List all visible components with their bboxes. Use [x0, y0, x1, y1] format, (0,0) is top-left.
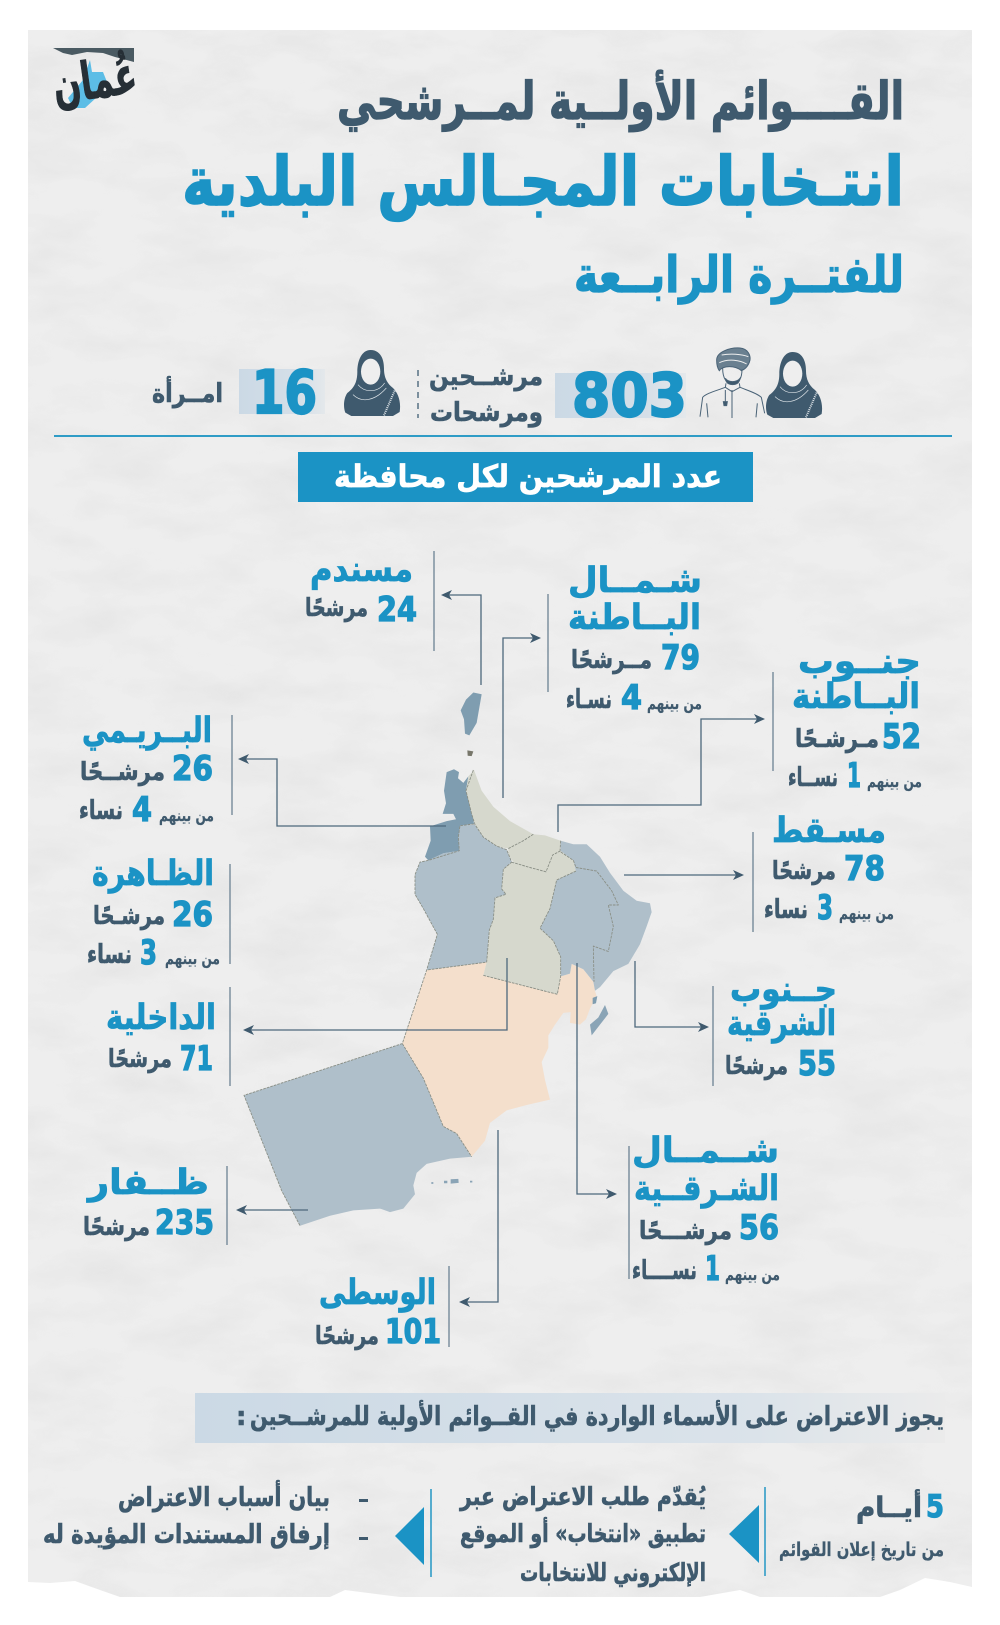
arrow: Al Buraimi — [238, 754, 446, 826]
region: Ad Dakhiliyah — [483, 851, 576, 994]
callout: South Batinah: 1 — [847, 756, 861, 796]
callout: North Batinah: مــرشحًا — [571, 645, 652, 675]
islands — [461, 692, 482, 735]
step: how to submit — [458, 1482, 706, 1588]
callout: Ad Dhahirah: 3 — [140, 933, 157, 973]
callout: North Sharqiyah: مرشـــحًا — [639, 1216, 732, 1246]
callout: Ad Dhahirah: الظـاهرة — [92, 854, 214, 894]
step: 5 days: 5 — [926, 1489, 944, 1525]
callout: South Sharqiyah — [713, 970, 837, 1086]
callout: South Sharqiyah: جــنوب — [730, 970, 837, 1010]
callout: Dhofar — [83, 1163, 227, 1245]
arrow: Al Wusta — [459, 1130, 498, 1307]
callout: Dhofar: ظــفار — [86, 1163, 209, 1203]
step: requirements — [43, 1480, 368, 1550]
callout: South Sharqiyah: 55 — [798, 1044, 836, 1084]
callout: Al Buraimi: نساء — [79, 796, 123, 826]
step: how to submit: الإلكتروني للانتخابات — [520, 1558, 706, 1588]
callout: North Batinah: من بينهم — [647, 694, 702, 713]
callout: North Sharqiyah — [629, 1131, 780, 1289]
callout: Al Wusta — [315, 1266, 449, 1352]
callout: North Batinah: 4 — [621, 678, 642, 718]
callout: Al Wusta: 101 — [385, 1312, 441, 1352]
callout: Musandam: مسندم — [310, 550, 413, 590]
callout: Al Buraimi: البــريـمي — [82, 711, 212, 751]
title line 3: للفتــرة الرابــعة — [574, 246, 904, 305]
region: Al Buraimi — [425, 769, 474, 860]
callout: North Batinah — [548, 561, 702, 718]
callout: Al Buraimi: 4 — [132, 790, 152, 830]
callout: South Batinah: نســاء — [788, 763, 838, 793]
callout: South Batinah: من بينهم — [867, 772, 922, 791]
arrow: North Batinah — [503, 633, 541, 798]
callout: South Sharqiyah: الشرقية — [727, 1004, 836, 1044]
callout: North Sharqiyah: شــمــال — [632, 1131, 779, 1171]
label: candidates — [429, 362, 543, 428]
803 number: 803 — [572, 361, 687, 431]
callout: Muscat: 3 — [817, 888, 833, 928]
step: how to submit: يُقدّم طلب الاعتراض عبر — [458, 1482, 706, 1512]
callout: Ad Dhahirah — [87, 854, 230, 973]
callout: North Batinah: 79 — [661, 638, 700, 678]
label: women: امــرأة — [152, 376, 223, 409]
16 number: 16 — [252, 358, 317, 428]
callout: North Batinah: نسـاء — [566, 685, 612, 715]
logo: Oman newspaper — [49, 46, 141, 117]
callout: North Batinah: البــاطنة — [568, 598, 701, 638]
callout: Muscat: مسـقط — [772, 811, 886, 851]
arrow: South Sharqiyah — [635, 961, 709, 1032]
objection heading band: : — [236, 1402, 246, 1432]
region: Muscat and Sharqiyah — [540, 841, 652, 991]
map of Oman — [244, 692, 652, 1226]
callout: Ad Dakhiliyah — [106, 987, 230, 1086]
icon: woman candidate — [766, 352, 822, 418]
step: 5 days — [779, 1489, 944, 1561]
title — [182, 69, 904, 305]
stats row — [152, 348, 822, 431]
callout: Al Wusta: مرشحًا — [315, 1321, 379, 1351]
callout: South Batinah: مـرشـحًا — [795, 724, 879, 754]
arrow: North Sharqiyah — [577, 963, 617, 1199]
callout: South Batinah: البــاطنة — [792, 677, 920, 717]
callout: Ad Dhahirah: 26 — [172, 895, 213, 935]
logo: Oman newspaper: عُمان — [49, 46, 141, 117]
callout: Ad Dakhiliyah: الداخلية — [106, 998, 216, 1038]
arrow: Musandam — [441, 590, 481, 685]
callout: Al Buraimi: مرشــحًا — [80, 757, 165, 787]
callout: Al Buraimi: من بينهم — [159, 806, 214, 825]
callout: South Sharqiyah: مرشحًا — [725, 1051, 788, 1081]
callout: Ad Dhahirah: نساء — [87, 940, 132, 970]
region: South Batinah — [508, 834, 561, 872]
label: candidates: مرشــحين — [429, 362, 543, 392]
callout: Dhofar: مرشحًا — [83, 1212, 150, 1242]
callout: Musandam: مرشحًا — [305, 593, 368, 623]
callout: North Batinah: شـمــال — [568, 561, 702, 601]
region: Al Dhahirah — [415, 825, 512, 970]
callout: Al Buraimi: 26 — [172, 749, 213, 789]
callout: Ad Dakhiliyah: 71 — [180, 1039, 213, 1079]
callout: North Sharqiyah: 56 — [739, 1208, 779, 1248]
callout: Al Wusta: الوسطى — [319, 1273, 436, 1313]
callout: Muscat — [753, 811, 894, 932]
icon: man in turban — [700, 348, 765, 418]
region: Dhofar — [244, 1044, 472, 1226]
callout: Muscat: مرشحًا — [772, 856, 836, 886]
callout: Ad Dhahirah: مرشـحًا — [93, 901, 165, 931]
callout: North Sharqiyah: 1 — [705, 1249, 720, 1289]
region: North Batinah — [466, 770, 533, 849]
arrow: Muscat — [624, 870, 744, 880]
callout: North Sharqiyah: الشـرقــية — [634, 1169, 779, 1209]
step: 5 days: أيــام — [856, 1489, 922, 1524]
arrow: triangle 1 — [729, 1505, 759, 1563]
step: how to submit: تطبيق «انتخاب» أو الموقع — [460, 1517, 706, 1549]
arrow: Dhofar — [236, 1205, 308, 1215]
callout: Muscat: من بينهم — [839, 904, 894, 923]
arrow: triangle 2 — [395, 1507, 424, 1565]
objection heading band — [195, 1393, 945, 1443]
callout: Musandam: 24 — [377, 590, 417, 630]
region: Al Wusta — [402, 962, 597, 1157]
callout: Muscat: نساء — [764, 895, 808, 925]
section banner — [298, 452, 753, 502]
callout: Ad Dakhiliyah: مرشحًا — [108, 1044, 172, 1074]
icon: woman — [344, 350, 400, 416]
callout: Ad Dhahirah: من بينهم — [165, 949, 220, 968]
callout: Al Buraimi — [79, 711, 232, 830]
callout: North Sharqiyah: نســــاء — [632, 1256, 697, 1286]
step: requirements: إرفاق المستندات المؤيدة له — [43, 1520, 330, 1550]
section banner: عدد المرشحين لكل محافظة — [334, 459, 722, 495]
callout: Muscat: 78 — [844, 849, 885, 889]
callout: Dhofar: 235 — [155, 1203, 214, 1243]
callout: Musandam — [305, 550, 434, 651]
arrow: South Batinah — [558, 714, 765, 832]
label: candidates: ومرشحات — [430, 398, 543, 428]
callout: South Batinah — [773, 642, 922, 796]
callout: South Batinah: جنــوب — [798, 642, 921, 682]
step: 5 days: من تاريخ إعلان القوائم — [779, 1539, 944, 1561]
callout: North Sharqiyah: من بينهم — [725, 1265, 780, 1284]
callout: South Batinah: 52 — [882, 717, 921, 757]
step: requirements: بيان أسباب الاعتراض — [118, 1480, 330, 1513]
arrow: Ad Dakhiliyah — [243, 958, 507, 1035]
